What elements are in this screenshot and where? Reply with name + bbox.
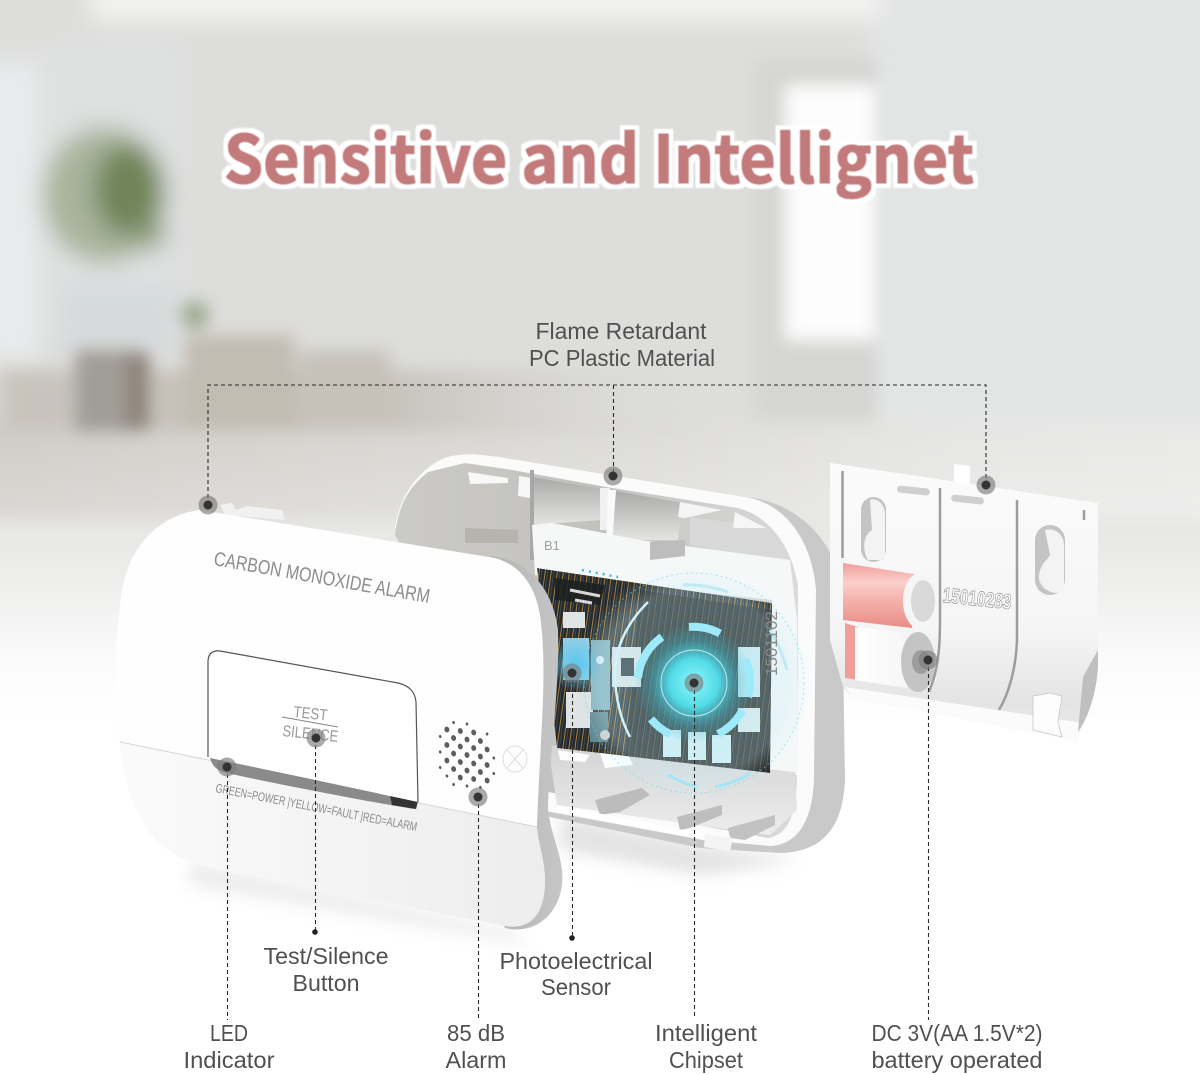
- slots: [897, 485, 930, 496]
- label: intelligent chipset: Chipset: [669, 1047, 744, 1073]
- front cover: [118, 503, 562, 930]
- top compartments: [465, 470, 797, 775]
- label: flame retardant material: Flame Retardant: [536, 318, 707, 344]
- label: test silence button: Test/Silence: [264, 943, 388, 969]
- title: Sensitive and Intellignet: [224, 107, 974, 203]
- plate serial: 15010283: [941, 584, 1013, 614]
- label: intelligent chipset: Intelligent: [655, 1020, 758, 1046]
- circuit board: [537, 568, 772, 773]
- key holes: [861, 497, 1065, 595]
- label: led indicator: LED: [210, 1020, 248, 1046]
- chamber: [395, 463, 798, 838]
- shell outer rim: [395, 454, 845, 853]
- label: 85 db alarm: Alarm: [446, 1047, 506, 1073]
- label: photoelectrical sensor: Sensor: [541, 974, 611, 1000]
- label: intelligent chipset: [655, 1020, 758, 1073]
- plate clips: [954, 464, 1062, 737]
- lower textured band: [262, 782, 545, 926]
- recycling mark: [503, 746, 527, 772]
- label: flame retardant material: PC Plastic Material: [529, 345, 715, 371]
- button text: TEST: [293, 704, 328, 725]
- battery 1: [843, 563, 937, 629]
- battery 2: [845, 623, 935, 692]
- label: photoelectrical sensor: Photoelectrical: [500, 948, 652, 974]
- board serial: 1501102: [762, 611, 781, 676]
- ground shadows: [190, 815, 800, 945]
- cover brand text: CARBON MONOXIDE ALARM: [212, 548, 432, 608]
- label: photoelectrical sensor: [500, 948, 652, 1000]
- callout markers: [198, 466, 996, 806]
- dashed leader lines: [208, 385, 986, 1020]
- label: led indicator: Indicator: [184, 1047, 275, 1073]
- back plate with batteries: [830, 463, 1098, 741]
- label: 85 db alarm: [446, 1020, 506, 1073]
- label: test silence button: [264, 943, 388, 996]
- button outline: [208, 651, 418, 802]
- bottom clips: [548, 744, 797, 851]
- plate body: [830, 463, 1098, 741]
- legend text: GREEN=POWER |YELLOW=FAULT |RED=ALARM: [214, 781, 418, 834]
- label: test silence button: Button: [292, 970, 360, 996]
- label: led indicator: [184, 1020, 275, 1073]
- indicator strip: [210, 758, 418, 809]
- middle shell with circuit board: [395, 454, 845, 853]
- button text: [282, 704, 339, 746]
- label: battery: DC 3V(AA 1.5V*2): [872, 1020, 1042, 1046]
- cover side wall: [490, 556, 562, 929]
- label: battery: [872, 1020, 1042, 1073]
- speaker holes: [424, 705, 510, 805]
- plate ribs: [842, 471, 1084, 710]
- label: 85 db alarm: 85 dB: [447, 1020, 505, 1046]
- card above the board: [532, 523, 797, 775]
- shell white lip: [395, 454, 816, 846]
- label: flame retardant material: [529, 318, 715, 371]
- top compartments: B1: [544, 538, 560, 553]
- chip glow: [550, 565, 812, 801]
- plate bottom lip: [845, 650, 1098, 741]
- top tabs: [220, 503, 285, 520]
- label: battery: battery operated: [872, 1047, 1042, 1073]
- button text: SILENCE: [282, 723, 339, 746]
- cover face: [115, 510, 545, 927]
